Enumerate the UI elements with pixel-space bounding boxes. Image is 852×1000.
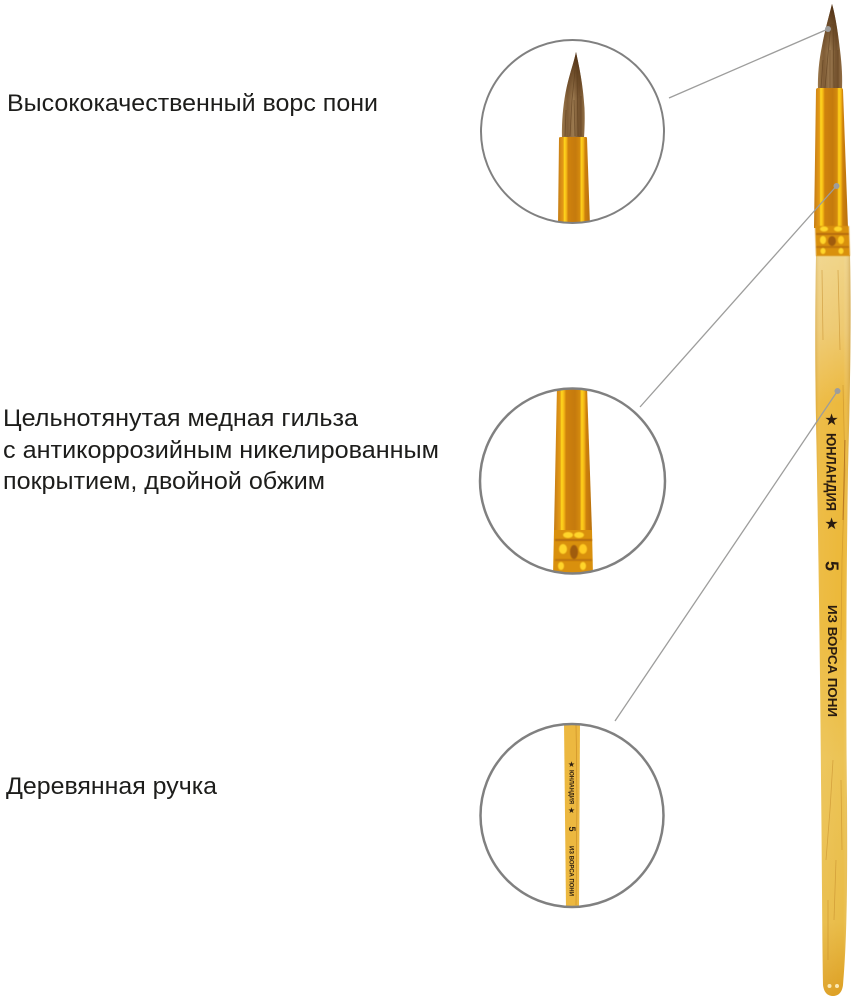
mini number: 5 xyxy=(567,826,577,832)
leader line: bristle xyxy=(669,26,831,98)
circle: ferrule detail xyxy=(480,386,665,576)
brush: full vertical brush xyxy=(814,4,851,996)
label: copper ferrule: покрытием, двойной обжим xyxy=(3,468,325,495)
wooden handle body xyxy=(815,255,851,996)
bristles xyxy=(818,4,842,90)
double crimp xyxy=(815,226,850,256)
label: pony bristle: Высококачественный ворс пони xyxy=(7,90,378,117)
mini star 2: ★ xyxy=(568,806,575,815)
circle: handle detail xyxy=(480,722,664,910)
label: copper ferrule: с антикоррозийным никелированным xyxy=(3,437,439,464)
mini star 1: ★ xyxy=(568,760,575,769)
circle: bristle detail xyxy=(481,40,664,226)
mini pony text: ИЗ ВОРСА ПОНИ xyxy=(568,846,574,897)
handle marking: brand: ЮНЛАНДИЯ xyxy=(824,433,838,511)
label: copper ferrule xyxy=(3,405,439,495)
handle marking: star 1: ★ xyxy=(824,412,839,429)
ferrule xyxy=(814,88,848,228)
mini brand text: ЮНЛАНДИЯ xyxy=(568,770,574,804)
handle marking: pony text: ИЗ ВОРСА ПОНИ xyxy=(825,605,840,717)
label: wooden handle: Деревянная ручка xyxy=(6,773,217,800)
leader line: ferrule xyxy=(640,183,840,407)
label: copper ferrule: Цельнотянутая медная гильза xyxy=(3,405,358,432)
leader line: handle xyxy=(615,388,840,721)
handle marking: star 2: ★ xyxy=(824,516,839,533)
handle marking: size: 5 xyxy=(822,561,842,571)
